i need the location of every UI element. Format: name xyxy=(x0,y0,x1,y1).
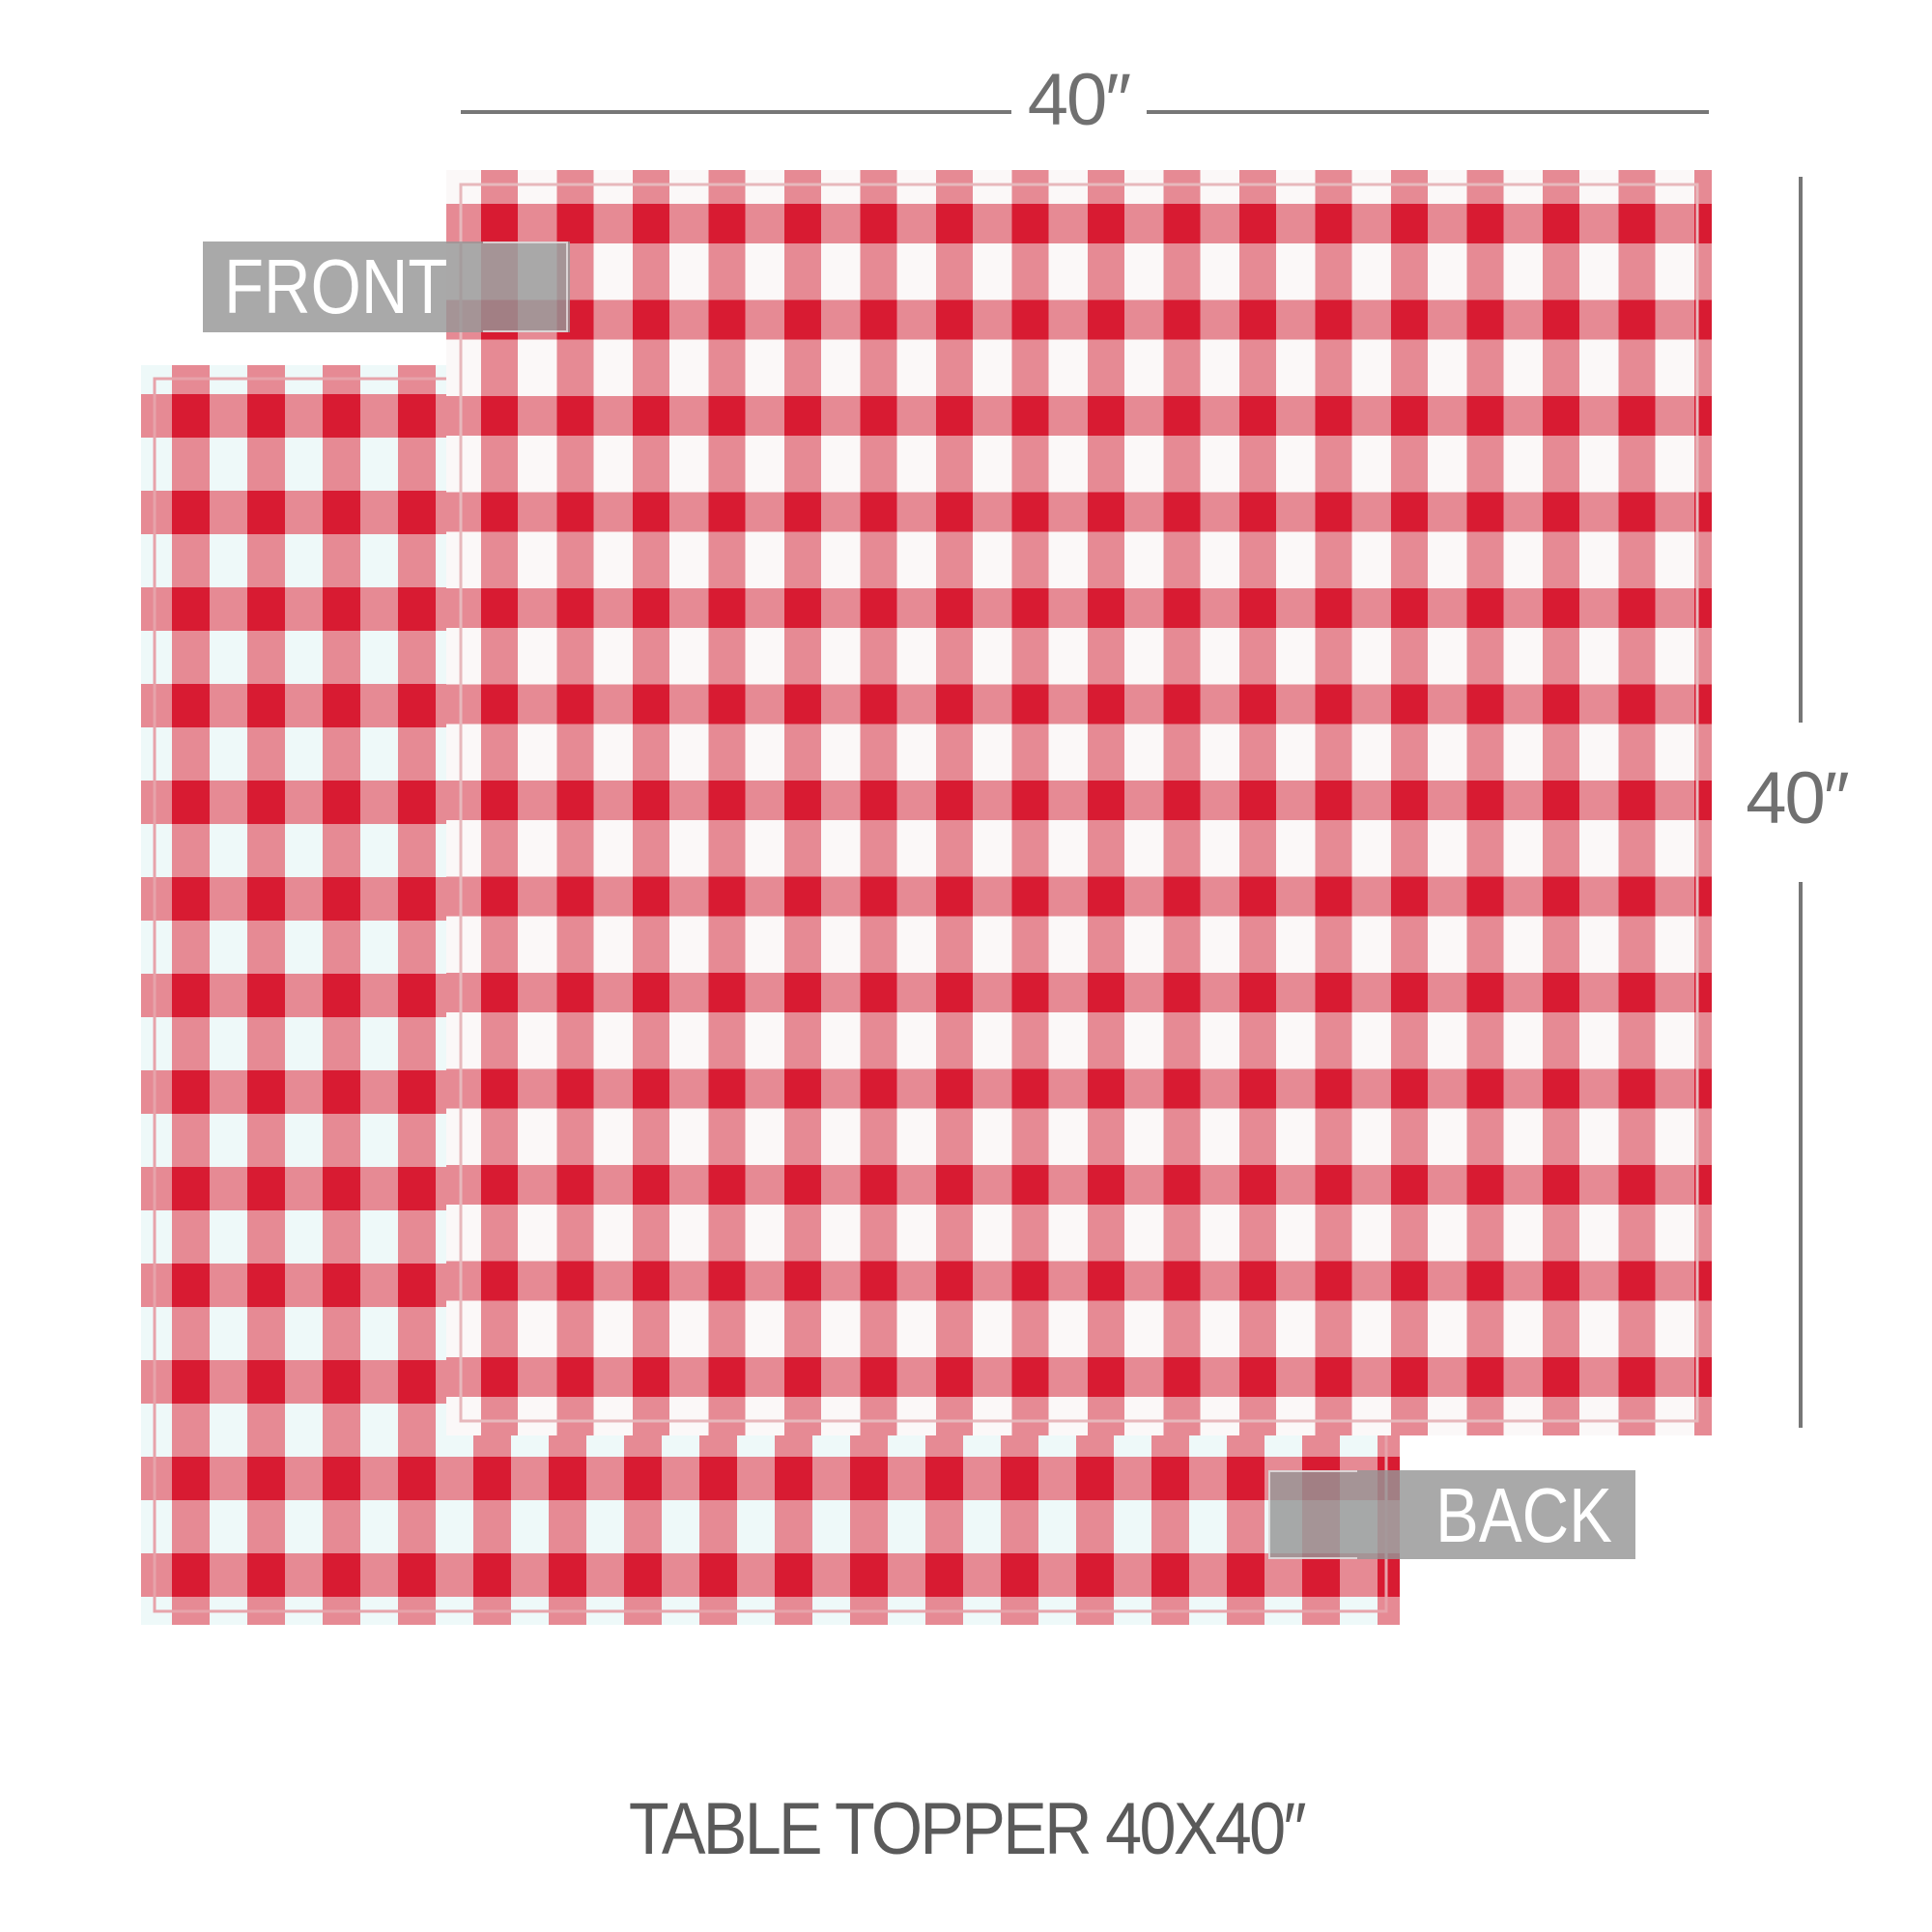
dimension: width: 40″ xyxy=(1028,59,1129,141)
dimension: height: 40″ xyxy=(1746,757,1848,839)
front cloth xyxy=(446,170,1712,1435)
dimension: width xyxy=(461,59,1709,141)
label: back xyxy=(1268,1470,1635,1559)
title: TABLE TOPPER 40X40″ xyxy=(628,1788,1304,1870)
dimension: height xyxy=(1746,177,1849,1428)
label: front: FRONT xyxy=(224,243,447,329)
back cloth xyxy=(141,365,1400,1625)
label: front xyxy=(203,242,570,332)
label: back: BACK xyxy=(1435,1472,1612,1558)
